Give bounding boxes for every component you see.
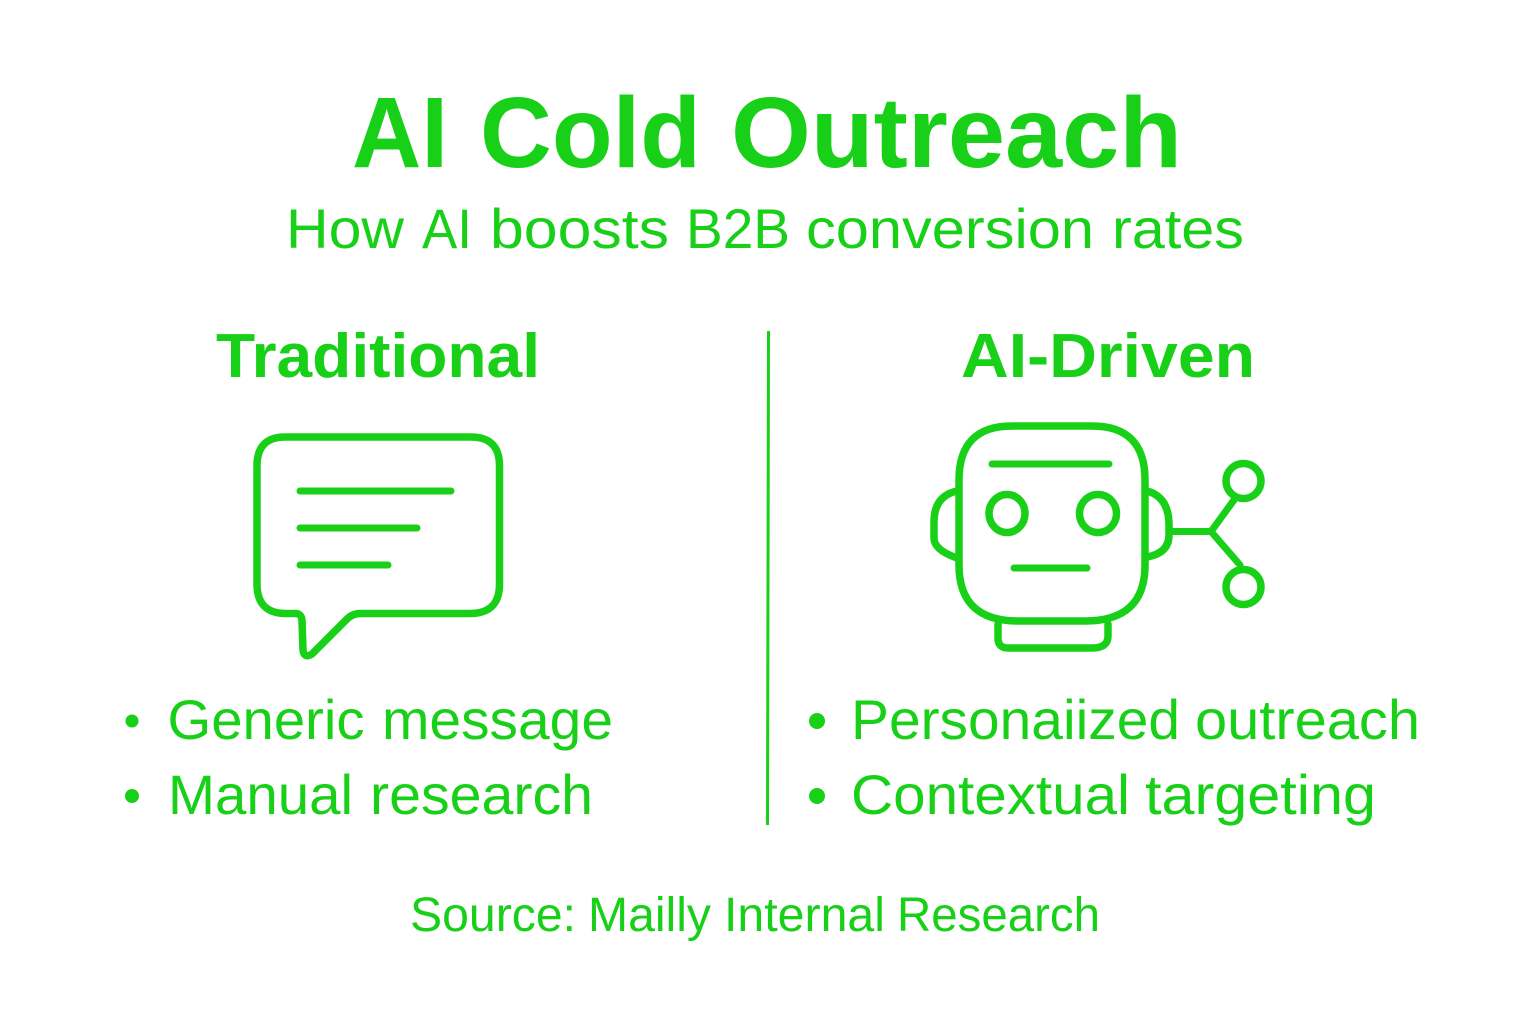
list: AI-driven: targeting bbox=[1145, 763, 1376, 826]
source note bbox=[410, 889, 1100, 942]
subtitle: AI bbox=[422, 197, 472, 260]
list: traditional: Manual bbox=[168, 763, 353, 826]
icon: speech bubble bbox=[257, 437, 500, 656]
source note: Source: bbox=[410, 889, 576, 942]
list: AI-driven: outreach bbox=[1195, 688, 1420, 751]
title: Outreach bbox=[731, 77, 1182, 189]
title bbox=[352, 77, 1182, 189]
subtitle: boosts bbox=[490, 197, 669, 260]
list: AI-driven bbox=[809, 688, 1420, 826]
subtitle: How bbox=[286, 197, 405, 260]
list: traditional: research bbox=[370, 763, 593, 826]
subtitle: rates bbox=[1112, 197, 1244, 260]
list: AI-driven: Contextual bbox=[851, 763, 1130, 826]
title: Cold bbox=[480, 77, 701, 189]
heading: AI-driven: AI-Driven bbox=[961, 322, 1255, 391]
subtitle: conversion bbox=[806, 197, 1094, 260]
title: AI bbox=[352, 77, 448, 189]
list: traditional: message bbox=[382, 688, 613, 751]
divider bbox=[768, 331, 769, 825]
icon: robot with network bbox=[934, 426, 1261, 648]
source note: Internal bbox=[724, 889, 885, 942]
list: traditional bbox=[125, 688, 613, 826]
source note: Mailly bbox=[588, 889, 711, 942]
list: AI-driven: Personaiized bbox=[851, 688, 1180, 751]
heading: traditional: Traditional bbox=[216, 322, 540, 391]
list: traditional: Generic bbox=[168, 688, 364, 751]
subtitle: B2B bbox=[686, 197, 790, 260]
source note: Research bbox=[897, 889, 1100, 942]
subtitle bbox=[286, 197, 1244, 260]
